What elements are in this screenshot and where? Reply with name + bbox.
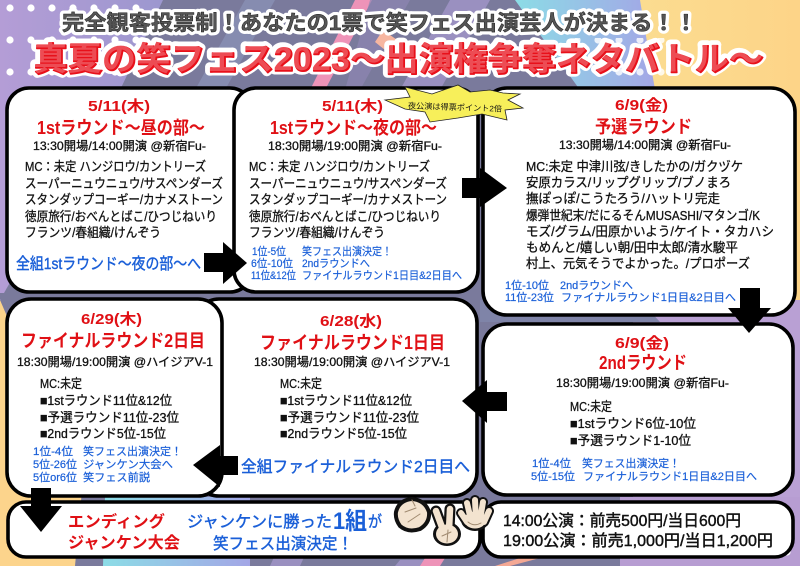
lineup (570, 399, 696, 448)
result note: 笑フェス出演決定！ (582, 456, 680, 470)
lineup: 徳原旅行/おべんとばこ/ひつじねいり (249, 209, 441, 224)
ending heading (68, 512, 180, 552)
lineup: ■1stラウンド6位-10位 (570, 416, 696, 431)
lineup: ■1stラウンド11位&12位 (280, 393, 412, 408)
schedule: 18:30開場/19:00開演 @ハイジアV-1 (254, 355, 450, 369)
ending heading: エンディング (68, 512, 165, 531)
lineup: モズ/グラム/田原かいよう/ケイト・タカハシ (526, 224, 774, 239)
title: 真夏の笑フェス2023〜出演権争奪ネタバトル〜 (33, 40, 763, 77)
winner message: ジャンケンに勝った (187, 513, 332, 531)
subtitle: 完全観客投票制！あなたの1票で笑フェス出演芸人が決まる！！ (62, 11, 697, 35)
lineup: MC：未定 ハンジロウ/カントリーズ (25, 159, 206, 174)
result note: 笑フェス出演決定！ (302, 244, 392, 258)
lineup: フランツ/春組織/けんぞう (25, 225, 161, 240)
winner message: 1組 (333, 508, 367, 535)
icon: paper hand (461, 500, 489, 531)
subtitle: 完全観客投票制！あなたの1票で笑フェス出演芸人が決まる！！ (62, 11, 697, 35)
panel: final round day 2 (7, 299, 222, 496)
lineup: 安原カラス/リップグリップ/ブノまろ (526, 175, 731, 190)
heading: 1stラウンド〜昼の部〜 (37, 118, 205, 138)
schedule: 18:30開場/19:00開演 @新宿Fu- (556, 376, 729, 390)
panel: 1st round daytime (7, 88, 252, 292)
result note: 5位-15位 (531, 470, 575, 483)
result note: 2ndラウンドへ (560, 279, 633, 292)
heading: ファイナルラウンド1日目 (260, 333, 445, 353)
arrow: day to evening (204, 242, 247, 284)
result note: 11位-23位 (505, 291, 554, 304)
callout: evening show bonus (385, 85, 523, 122)
lineup: MC：未定 ハンジロウ/カントリーズ (249, 159, 430, 174)
result note: 2ndラウンドへ (302, 257, 370, 270)
result note: 全組1stラウンド〜夜の部〜へ (16, 255, 201, 273)
result note: 1位-5位 (252, 245, 286, 258)
result note: ファイナルラウンド1日目&2日目へ (583, 470, 757, 483)
result note: ファイナルラウンド1日目&2日目へ (561, 291, 736, 304)
date: 6/9(金) (615, 96, 668, 114)
date: 5/11(木) (322, 98, 383, 115)
heading: 予選ラウンド (595, 117, 692, 137)
lineup: 撫ぽっぽ/こうたろう/ハットリ完走 (526, 191, 720, 206)
panel: 1st round evening (234, 88, 478, 292)
lineup: MC:未定 (40, 376, 82, 391)
icon: scissors hand (433, 509, 461, 546)
winner message: 笑フェス出演決定！ (213, 535, 353, 553)
lineup: ■予選ラウンド1-10位 (570, 433, 691, 448)
lineup: スタンダップコーギー/カナメストーン (249, 192, 447, 207)
arrow: preliminary to 2nd round (728, 288, 771, 333)
arrow: 2nd round to final day 1 (462, 380, 507, 423)
winner message: が (368, 513, 382, 531)
arrow: evening to preliminary (462, 168, 507, 207)
lineup (249, 159, 447, 240)
callout: evening show bonus: 夜公演は得票ポイント2倍 (408, 100, 502, 114)
date: 6/28(水) (320, 313, 382, 330)
lineup: スーパーニュウニュウ/サスペンダーズ (249, 176, 447, 191)
19:00 price: 19:00公演：前売1,000円/当日1,200円 (503, 532, 773, 550)
schedule: 18:30開場/19:00開演 @新宿Fu- (268, 139, 442, 153)
lineup: フランツ/春組織/けんぞう (249, 225, 385, 240)
lineup: MC:未定 (280, 376, 322, 391)
heading: 1stラウンド〜夜の部〜 (270, 118, 437, 138)
lineup: MC:未定 (570, 399, 612, 414)
result note: 11位&12位 (251, 269, 296, 282)
lineup (280, 376, 419, 441)
result note: ジャンケン大会へ (83, 457, 173, 471)
arrow: final day 1 to final day 2 (193, 445, 238, 487)
lineup: ■予選ラウンド11位-23位 (280, 410, 419, 425)
lineup: スーパーニュウニュウ/サスペンダーズ (25, 176, 223, 191)
schedule: 13:30開場/14:00開演 @新宿Fu- (559, 138, 731, 152)
heading: 2ndラウンド (599, 353, 687, 373)
winner message (187, 508, 382, 553)
lineup: 爆弾世紀末/だにるそんMUSASHI/マタンゴ/K (526, 208, 760, 223)
result note: ファイナルラウンド1日目&2日目へ (302, 269, 462, 282)
title: 真夏の笑フェス2023〜出演権争奪ネタバトル〜 (33, 40, 763, 77)
result note: 5位or6位 (33, 471, 77, 484)
result note (33, 444, 182, 484)
schedule: 13:30開場/14:00開演 @新宿Fu- (33, 139, 206, 153)
result note: 1位-4位 (33, 445, 73, 458)
arrow: final day 2 to ending (20, 488, 62, 532)
lineup (40, 376, 179, 441)
title: 真夏の笑フェス2023〜出演権争奪ネタバトル〜 (34, 41, 764, 78)
panel: ending janken (8, 502, 480, 557)
lineup: ■2ndラウンド5位-15位 (40, 426, 166, 441)
lineup: ■1stラウンド11位&12位 (40, 393, 172, 408)
lineup: ■2ndラウンド5位-15位 (280, 426, 407, 441)
lineup: 徳原旅行/おべんとばこ/ひつじねいり (25, 209, 217, 224)
result note (251, 244, 462, 282)
date: 5/11(木) (88, 98, 150, 115)
lineup: スタンダップコーギー/カナメストーン (25, 192, 223, 207)
lineup: ■予選ラウンド11位-23位 (40, 410, 179, 425)
lineup: MC:未定 中津川弦/きしたかの/ガクヅケ (526, 159, 743, 174)
result note: 1位-10位 (505, 279, 549, 292)
date: 6/9(金) (615, 334, 669, 352)
result note: 5位-26位 (33, 458, 77, 471)
lineup (25, 159, 223, 240)
result note: 全組ファイナルラウンド2日目へ (241, 458, 470, 476)
result note (531, 456, 757, 483)
panel: final round day 1 (195, 299, 477, 496)
result note (505, 279, 736, 304)
icon: rock hand (396, 499, 429, 530)
result note: 笑フェス前説 (83, 470, 150, 484)
lineup: もめんと/嬉しい朝/田中太郎/清水駿平 (526, 240, 738, 255)
lineup: 村上、元気そうでよかった。/プロポーズ (526, 256, 750, 271)
panel: preliminary round (483, 88, 795, 315)
result note: 6位-10位 (251, 257, 293, 270)
date: 6/29(木) (81, 311, 142, 328)
result note: 1位-4位 (532, 457, 571, 470)
14:00 price: 14:00公演：前売500円/当日600円 (503, 512, 741, 530)
lineup (526, 159, 774, 271)
panel: 2nd round (483, 324, 793, 495)
ending heading: ジャンケン大会 (68, 534, 180, 552)
heading: ファイナルラウンド2日目 (21, 331, 205, 351)
panel: ticket prices (483, 502, 793, 557)
schedule: 18:30開場/19:00開演 @ハイジアV-1 (17, 355, 213, 369)
result note: 笑フェス出演決定！ (83, 444, 182, 458)
